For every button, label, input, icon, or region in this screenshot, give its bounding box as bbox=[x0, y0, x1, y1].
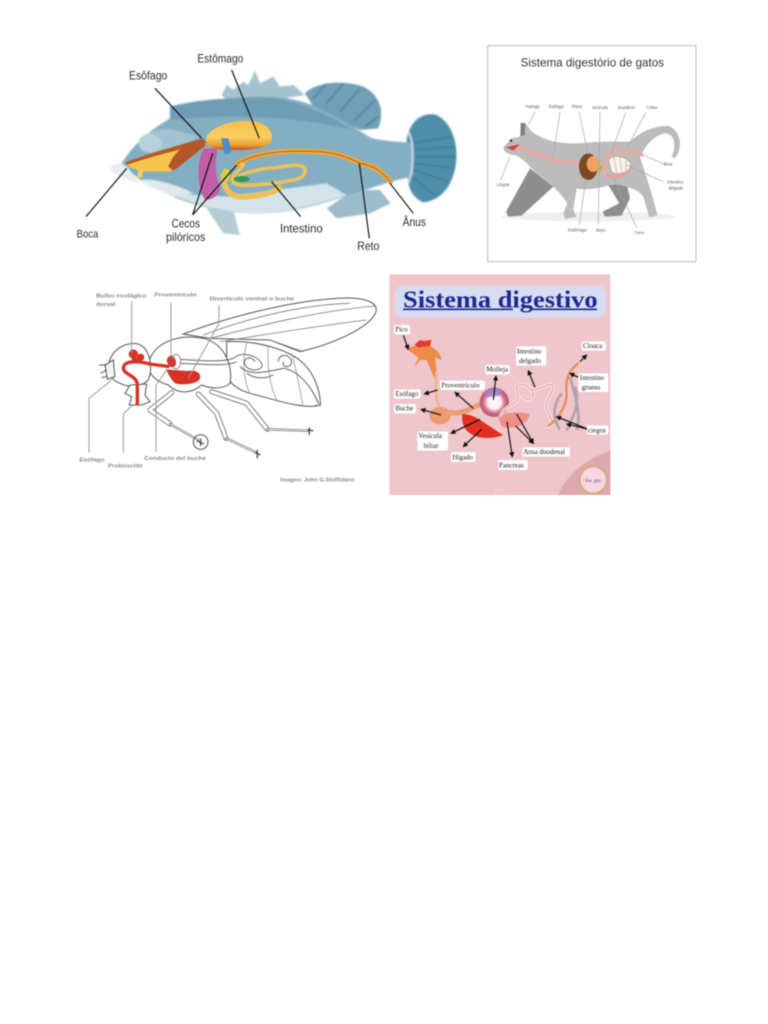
tail rays bbox=[313, 83, 455, 197]
label: Intestino delgado: Intestino bbox=[517, 347, 542, 355]
label: Pancreas bbox=[498, 460, 528, 470]
label: Cloaca: Cloaca bbox=[583, 342, 602, 350]
fly abdomen bbox=[227, 341, 321, 406]
chicken labels bbox=[394, 325, 608, 470]
label: Higado bbox=[451, 452, 476, 462]
cat illustration bbox=[502, 123, 680, 221]
fly labels: Probóscide bbox=[108, 463, 143, 469]
cat labels: Intestino bbox=[667, 180, 684, 185]
fly labels: Esófago bbox=[79, 458, 105, 464]
fish body bbox=[110, 71, 457, 235]
label: Molleja: Molleja bbox=[486, 366, 508, 374]
fish labels: Ânus bbox=[403, 216, 426, 229]
fish labels: Boca bbox=[77, 228, 98, 240]
label: Intestino grueso bbox=[578, 373, 608, 392]
fish labels bbox=[77, 53, 426, 253]
fly labels: Imagen: John G.Stoffolano bbox=[280, 478, 354, 484]
label: Cloaca bbox=[582, 341, 606, 351]
fly labels: Divertículo ventral o buche bbox=[210, 297, 294, 303]
fly coiled intestine bbox=[180, 355, 318, 403]
cat labels: Estômago bbox=[568, 227, 587, 232]
label: Pancreas: Pancreas bbox=[499, 461, 524, 469]
label: Ansa duodenal: Ansa duodenal bbox=[523, 448, 565, 456]
chicken arrows bbox=[403, 335, 588, 457]
label: Pico bbox=[394, 325, 410, 334]
cat labels: Ceco bbox=[634, 230, 645, 235]
cat label lines bbox=[501, 112, 663, 227]
fly thorax bbox=[148, 337, 231, 392]
fly labels: dorsal bbox=[96, 302, 116, 308]
cat labels: ânus bbox=[663, 162, 672, 167]
label: Intestino delgado: delgado bbox=[519, 357, 542, 365]
label: Intestino delgado bbox=[516, 346, 546, 366]
fly labels: Conducto del buche bbox=[144, 456, 206, 462]
label: Vesicula biliar: Vesícula bbox=[418, 432, 442, 440]
label: Higado: Hígado bbox=[452, 453, 473, 461]
fly digestive tract in red bbox=[123, 349, 200, 405]
label: ciegos: ciegos bbox=[588, 426, 606, 434]
carousel dots bbox=[495, 489, 504, 491]
chicken panel background bbox=[389, 274, 610, 495]
panel: fish digestive system bbox=[77, 53, 457, 253]
cat labels: Cólon bbox=[647, 105, 658, 110]
fly legs bbox=[150, 392, 308, 453]
fly head bbox=[108, 344, 151, 386]
panel: chicken digestive system bbox=[389, 274, 610, 495]
label: Proventriculo: Proventrículo bbox=[441, 381, 480, 389]
panel: cat digestive system bbox=[488, 46, 696, 262]
label: Pico: Pico bbox=[395, 326, 408, 334]
cat panel title: Sistema digestório de gatos bbox=[521, 57, 664, 70]
fish labels: Reto bbox=[357, 240, 379, 253]
logo badge bbox=[580, 467, 607, 493]
title banner: Sistema digestivo bbox=[403, 287, 598, 314]
cat labels: Baço bbox=[596, 227, 606, 232]
fly label lines bbox=[89, 302, 219, 453]
fish labels: Estômago bbox=[197, 53, 243, 66]
logo badge: Sist. gen. bbox=[585, 479, 602, 484]
label: Intestino grueso: Intestino bbox=[580, 374, 605, 382]
chicken organs bbox=[406, 339, 578, 438]
fly labels bbox=[79, 293, 354, 484]
cat labels: Língua bbox=[497, 182, 510, 187]
label: Esofago: Esófago bbox=[395, 390, 419, 398]
fly labels: Proventrículo bbox=[154, 293, 197, 299]
cat labels: Vesícula bbox=[592, 105, 608, 110]
label: Vesicula biliar: biliar bbox=[424, 442, 439, 450]
fish label lines bbox=[86, 70, 413, 238]
cat labels bbox=[497, 104, 684, 235]
fish labels: pilóricos bbox=[166, 231, 205, 244]
label: Vesicula biliar bbox=[417, 431, 448, 451]
cat labels: delgado bbox=[668, 186, 684, 191]
fish labels: Cecos bbox=[172, 217, 200, 230]
fly foot details bbox=[193, 427, 313, 458]
fish labels: Esôfago bbox=[129, 69, 167, 82]
cat labels: Duodeno bbox=[618, 105, 636, 110]
fly proboscis bbox=[125, 384, 150, 405]
fish labels: Intestino bbox=[280, 222, 323, 235]
fish digestive organs bbox=[125, 121, 391, 200]
fly labels: Bulbo esofágico bbox=[96, 294, 147, 300]
fly wing bbox=[183, 298, 376, 352]
cat panel frame bbox=[488, 46, 696, 262]
label: Intestino grueso: grueso bbox=[582, 383, 601, 391]
label: Buche: Buche bbox=[395, 405, 413, 413]
label: Buche bbox=[394, 404, 416, 413]
cat labels: Faringe bbox=[526, 104, 540, 109]
corner decoration bbox=[558, 451, 610, 495]
panel: fly digestive system bbox=[79, 293, 376, 484]
cat labels: Esôfago bbox=[549, 104, 565, 109]
cat labels: Piloro bbox=[572, 104, 583, 109]
